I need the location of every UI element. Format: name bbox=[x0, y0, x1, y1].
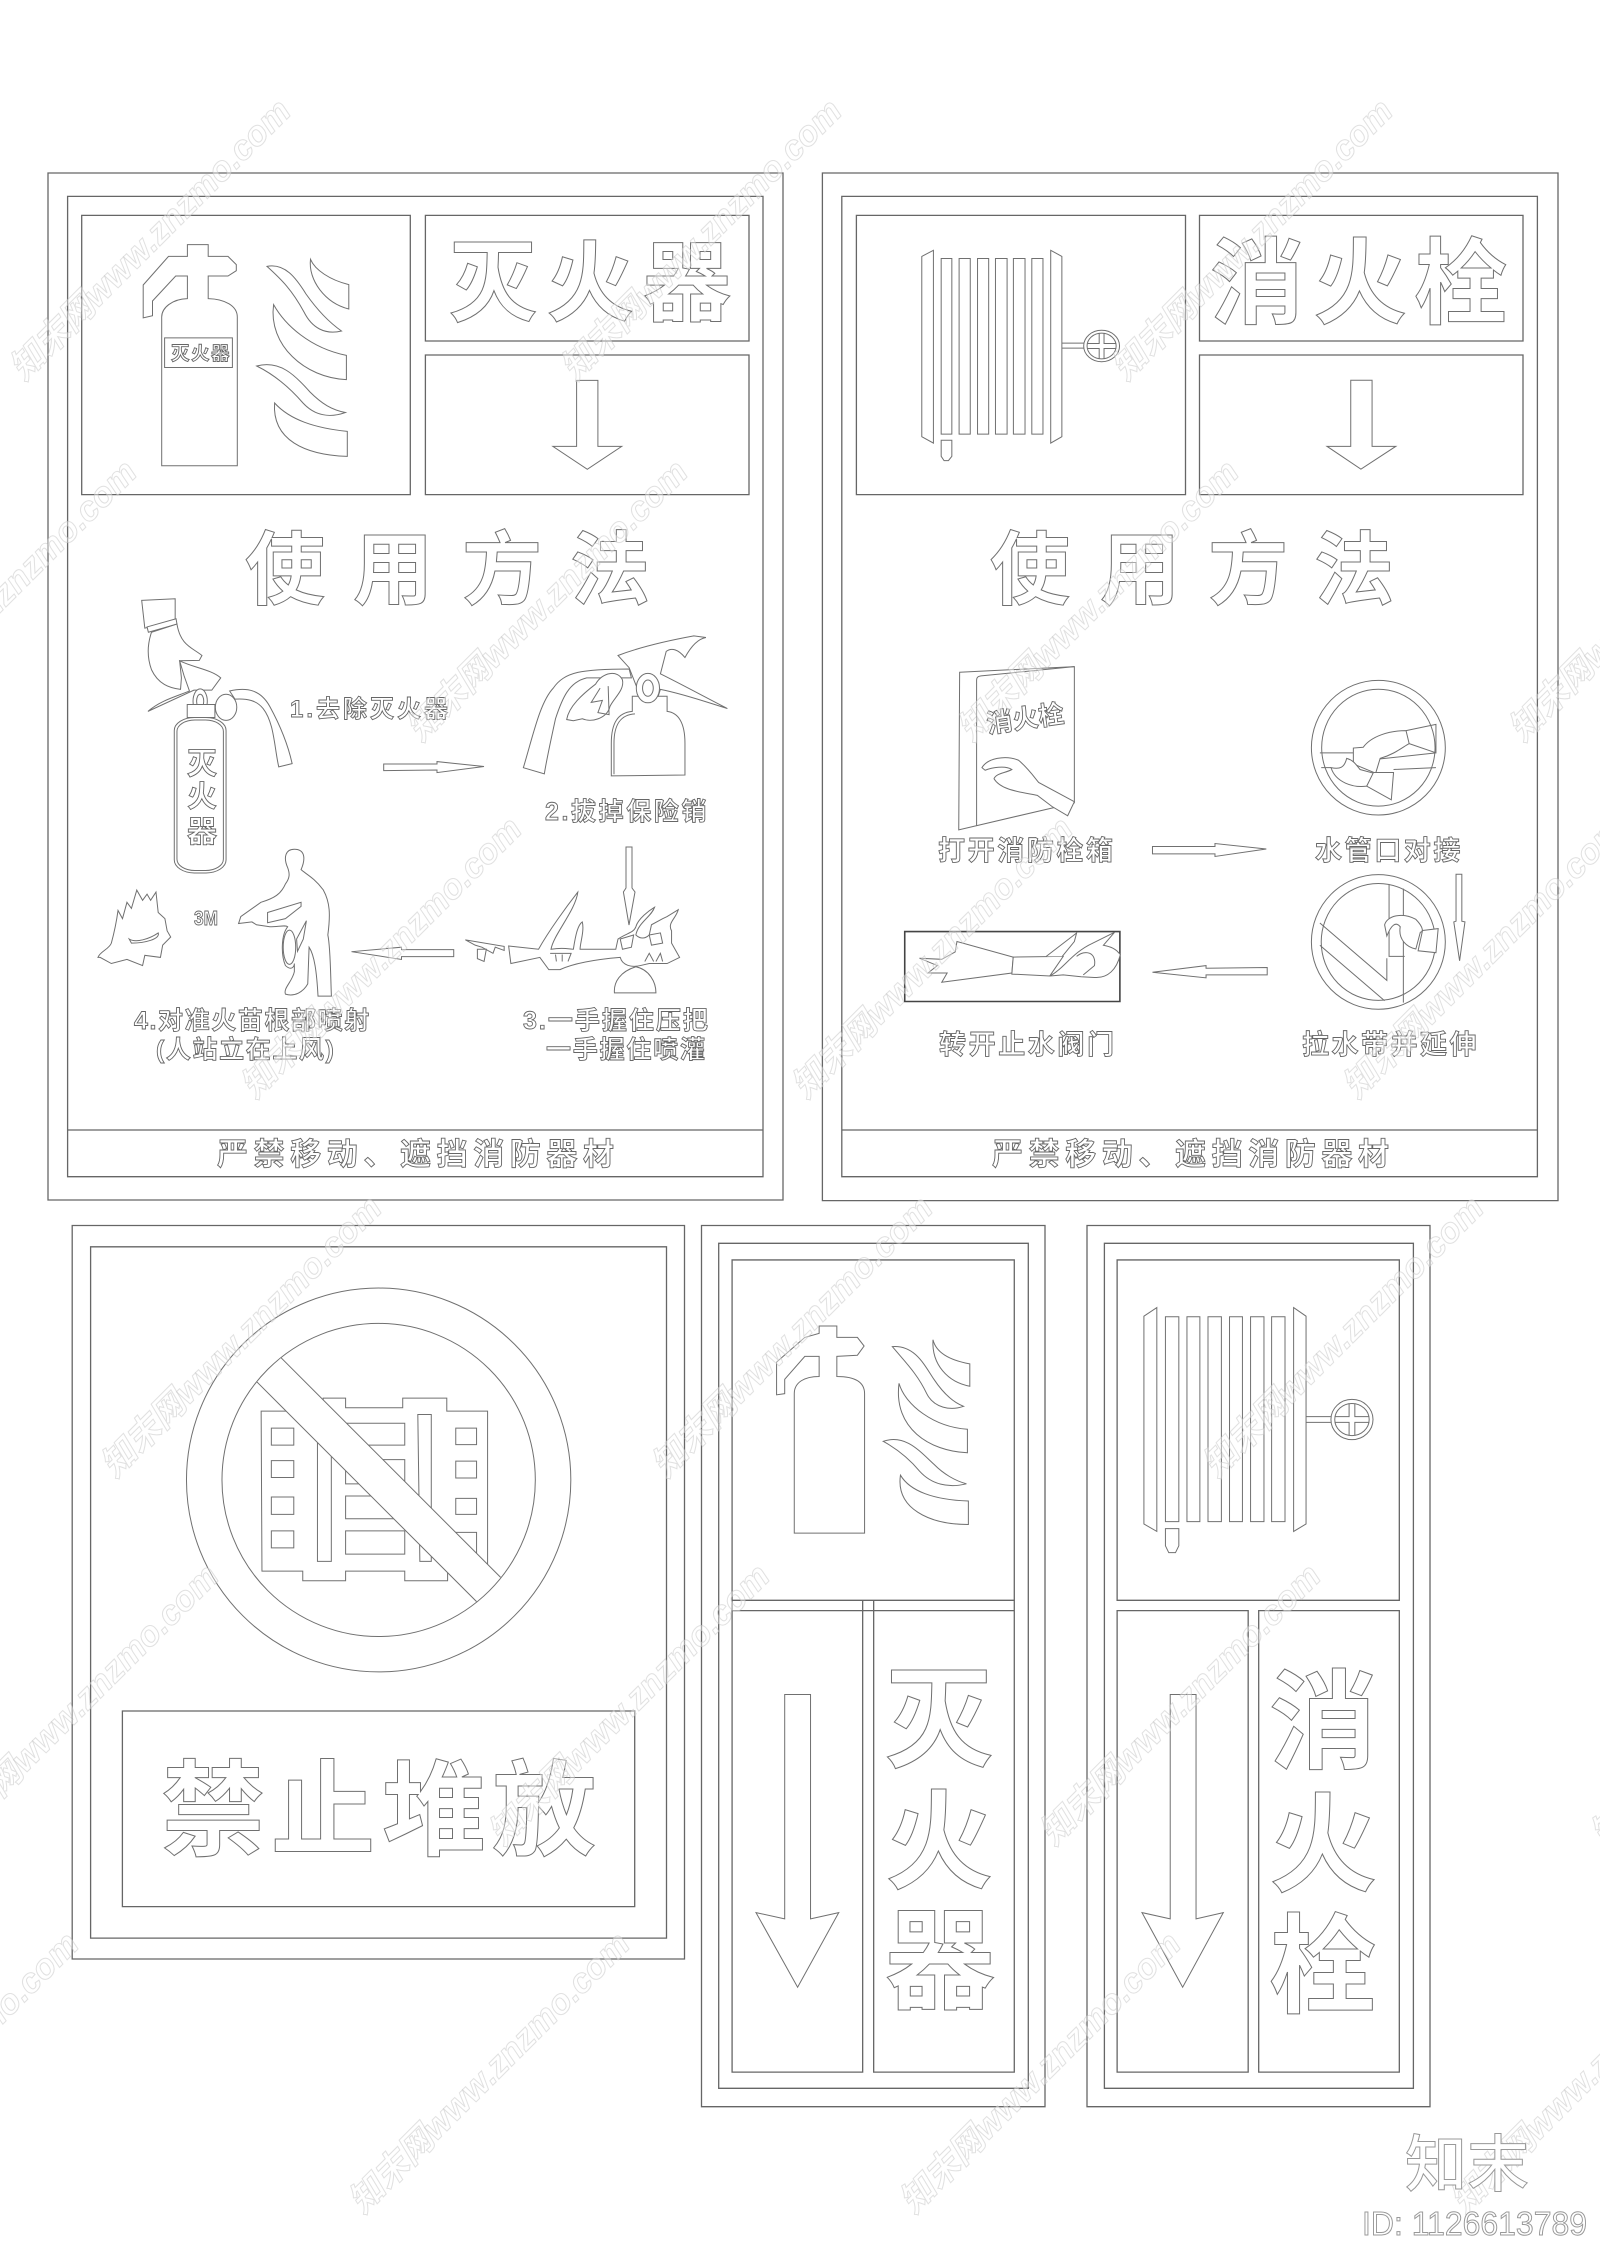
panel: no stacking sign bbox=[72, 1226, 684, 1959]
heading: 使用方法: 使用方法 bbox=[990, 526, 1394, 615]
text: 禁止堆放: 禁止堆放 bbox=[161, 1754, 596, 1870]
watermarks: 知末网www.znzmo.com bbox=[400, 453, 695, 749]
watermarks: 知末网www.znzmo.com bbox=[482, 1557, 777, 1853]
text: 消火栓 vertical: 火 bbox=[1269, 1785, 1377, 1906]
step 2 caption: 2.拔掉保险销 bbox=[545, 798, 709, 826]
panel: fire hydrant usage sign bbox=[822, 173, 1558, 1201]
arrow: down bbox=[553, 380, 622, 469]
watermarks: 知末网www.znzmo.com bbox=[3, 92, 298, 388]
heading: 消火栓: 消火栓 bbox=[1210, 231, 1508, 336]
step 2 illustration bbox=[523, 636, 727, 776]
footer text: 严禁移动、遮挡消防器材 bbox=[992, 1137, 1395, 1172]
hydrant caption 3: 转开止水阀门 bbox=[939, 1030, 1117, 1060]
step 3 illustration bbox=[465, 892, 680, 993]
id number: ID: 1126613789 bbox=[1362, 2205, 1587, 2242]
text: 灭火器 vertical: 器 bbox=[885, 1901, 995, 2024]
watermarks: 知末网www.znzmo.com bbox=[1105, 92, 1400, 388]
icon: coupling circle bbox=[1311, 680, 1445, 815]
heading: 使用方法: 使用方法 bbox=[245, 526, 650, 615]
arrow: down bbox=[756, 1694, 839, 1987]
watermarks: 知末网www.znzmo.com bbox=[554, 92, 849, 388]
icon: prohibition over building bbox=[186, 1288, 571, 1672]
icon: cabinet bbox=[959, 667, 1074, 830]
text: 消火栓 vertical: 栓 bbox=[1269, 1906, 1377, 2027]
icon: hose extension circle bbox=[1311, 875, 1445, 1009]
arrow down bbox=[623, 847, 635, 925]
icon: extinguisher with flames: 灭火器 bbox=[171, 343, 231, 364]
watermarks: 知末网www.znzmo.com bbox=[893, 1925, 1188, 2221]
text: 灭火器 vertical: 火 bbox=[885, 1782, 993, 1903]
panel: vertical hydrant sign bbox=[1087, 1226, 1430, 2107]
heading: 灭火器: 灭火器 bbox=[449, 234, 731, 333]
text: 灭火器 vertical bbox=[885, 1660, 995, 2024]
hydrant caption 1: 打开消防栓箱 bbox=[938, 836, 1116, 866]
footer text: 严禁移动、遮挡消防器材 bbox=[217, 1137, 620, 1172]
arrow: down bbox=[1327, 380, 1396, 469]
3M distance label: 3M bbox=[194, 908, 218, 930]
watermarks: 知末网www.znzmo.com bbox=[785, 810, 1080, 1106]
extinguisher label: 灭 bbox=[187, 748, 217, 781]
step 3 caption line 2: 一手握住喷灌 bbox=[546, 1036, 707, 1064]
icon: nozzle jet bbox=[905, 932, 1120, 1001]
text: 消火栓 vertical bbox=[1269, 1662, 1377, 2027]
arrow right bbox=[384, 762, 484, 773]
watermarks: 知末网www.znzmo.com bbox=[234, 810, 529, 1106]
arrow right bbox=[1152, 844, 1266, 856]
hydrant steps illustrations bbox=[905, 667, 1465, 1009]
icon: hose reel bbox=[922, 250, 1120, 461]
panel: fire extinguisher usage sign bbox=[48, 173, 783, 1200]
icon: extinguisher bbox=[777, 1326, 970, 1533]
text: 灭火器 vertical: 灭 bbox=[885, 1660, 993, 1781]
sign inner boxes bbox=[732, 1260, 1014, 2072]
watermarks: 知末网www.znzmo.com bbox=[342, 1925, 637, 2221]
panel: fire extinguisher usage sign: 器 bbox=[187, 816, 217, 849]
hydrant caption 2: 水管口对接 bbox=[1315, 836, 1463, 866]
text: 消火栓 vertical: 消 bbox=[1269, 1662, 1377, 1783]
step 3 caption: 3.一手握住压把 bbox=[523, 1007, 710, 1035]
watermarks: 知末网www.znzmo.com bbox=[951, 453, 1246, 749]
arrow down bbox=[1454, 874, 1465, 961]
watermarks: 知末网www.znzmo.com bbox=[94, 1189, 389, 1485]
icon: hose reel bbox=[1144, 1308, 1373, 1553]
step 1 caption: 1.去除灭火器 bbox=[290, 696, 451, 723]
sign inner boxes bbox=[1117, 1260, 1399, 2072]
arrow left bbox=[351, 947, 454, 959]
step 4 illustration: person and fire bbox=[98, 849, 331, 996]
icon: extinguisher with flames bbox=[143, 245, 349, 466]
watermarks: 知末网www.znzmo.com bbox=[645, 1189, 940, 1485]
watermarks: 知末网www.znzmo.com bbox=[1196, 1189, 1491, 1485]
step 1 illustration bbox=[142, 599, 292, 873]
watermarks: 知末网www.znzmo.com bbox=[1033, 1557, 1328, 1853]
arrow left bbox=[1152, 966, 1267, 978]
panel: vertical extinguisher sign bbox=[702, 1226, 1045, 2107]
hydrant caption 4: 拉水带并延伸 bbox=[1302, 1029, 1479, 1060]
arrow: down bbox=[1142, 1694, 1223, 1987]
cabinet label: 消火栓 bbox=[985, 698, 1066, 739]
step 4 caption: 4.对准火苗根部喷射 bbox=[134, 1007, 371, 1035]
logo: 知末: 知末 bbox=[1405, 2131, 1529, 2200]
panel: fire extinguisher usage sign: 火 bbox=[187, 781, 217, 814]
step 4 caption line 2: (人站立在上风) bbox=[156, 1036, 335, 1064]
